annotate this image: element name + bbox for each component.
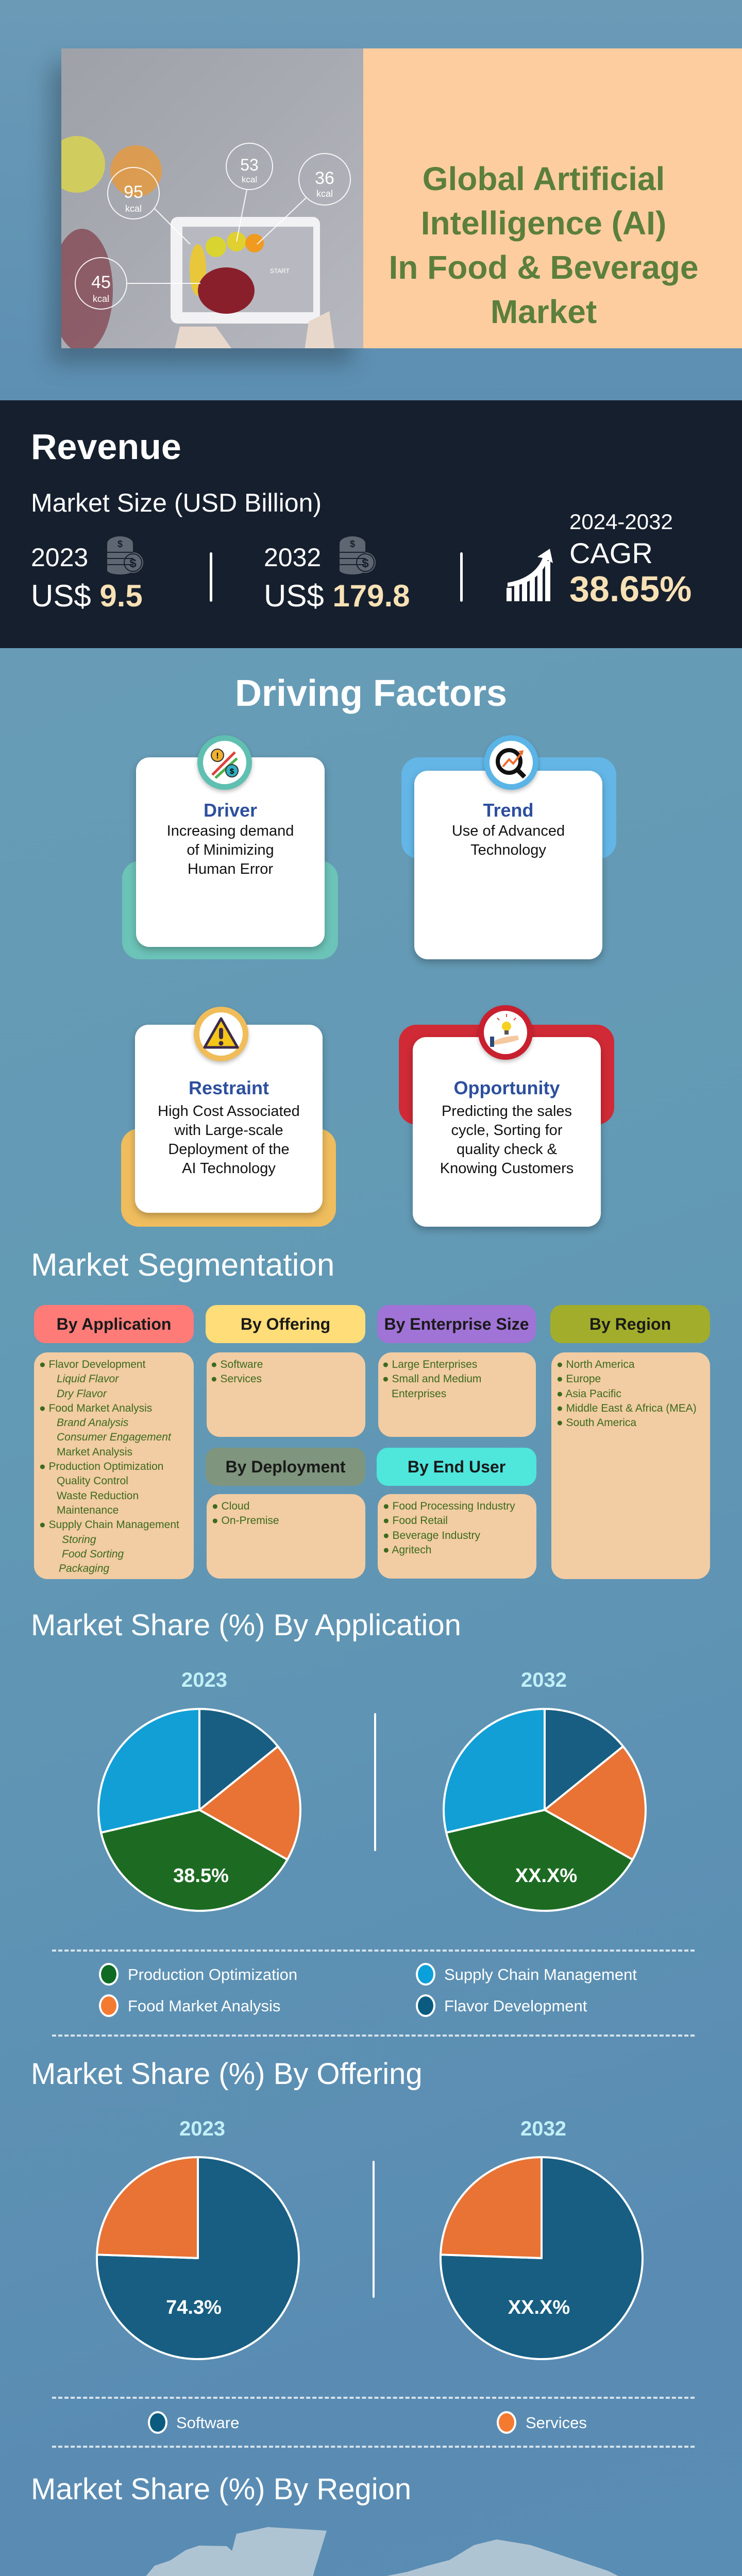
driving factors heading: Driving Factors (235, 673, 507, 714)
heading: market share by application: Market Share (%) By Application (31, 1608, 461, 1642)
panel: trend (401, 735, 616, 965)
icon: trend magnifier (484, 735, 538, 790)
2032 value: US$ 179.8 (264, 579, 410, 613)
panel: driver (122, 735, 338, 959)
segmentation: by application: Maintenance (57, 1504, 119, 1516)
opportunity text: quality check & (457, 1141, 557, 1158)
icon: coins: $ (362, 556, 369, 570)
segmentation: by deployment (206, 1448, 365, 1579)
trend text (452, 823, 565, 858)
restraint text: AI Technology (182, 1160, 276, 1177)
driver text: of Minimizing (187, 842, 274, 858)
segmentation: by application: ● Food Market Analysis (39, 1402, 152, 1414)
divider (373, 2161, 375, 2298)
legend: application: Flavor Development (444, 1997, 587, 2015)
segmentation: by application: Storing (62, 1534, 96, 1546)
segmentation: by application: Consumer Engagement (57, 1431, 171, 1443)
segmentation: by region: ● Europe (556, 1373, 601, 1385)
segmentation: by region: ● Middle East & Africa (MEA) (556, 1402, 697, 1414)
segmentation: by enterprise size: ● Small and Medium (382, 1373, 481, 1385)
opportunity text (440, 1103, 574, 1177)
pie chart: application 2023: 38.5% (173, 1865, 229, 1887)
world map (146, 2527, 618, 2576)
segmentation: by application: ● Flavor Development (39, 1359, 145, 1370)
trend text: Technology (470, 842, 546, 858)
opportunity text: Knowing Customers (440, 1160, 574, 1177)
trend text: Use of Advanced (452, 823, 565, 839)
icon: coins: $ (129, 556, 137, 570)
CAGR: 38.65% (569, 569, 692, 609)
restraint text (158, 1103, 300, 1177)
year label 2032: 2032 (520, 2117, 566, 2140)
legend: offering: Software (176, 2414, 239, 2432)
pie chart: application 2023 (97, 1708, 301, 1912)
icon: driver gears (197, 735, 252, 790)
segmentation: by offering: ● Software (211, 1359, 263, 1370)
segmentation: by end user (377, 1448, 536, 1579)
2023 value (31, 536, 143, 613)
banner image: photo of tablet with calories: kcal (93, 294, 109, 304)
segmentation: by application: ● Production Optimization (39, 1461, 163, 1472)
icon: coins (340, 536, 376, 574)
market size label: Market Size (USD Billion) (31, 488, 322, 517)
driver title: Driver (204, 800, 257, 821)
year label 2032: 2032 (521, 1669, 567, 1691)
panel: opportunity (399, 1005, 614, 1233)
title text (389, 160, 699, 330)
segmentation: by application: Dry Flavor (57, 1388, 107, 1400)
segmentation: by offering: ● Services (211, 1373, 262, 1385)
icon: driver gears: $ (230, 767, 234, 776)
banner image: photo of tablet with calories: 53 (240, 156, 259, 174)
segmentation: by application: Food Sorting (62, 1548, 124, 1560)
legend: offering: Services (526, 2414, 587, 2432)
panel: restraint (121, 1007, 336, 1227)
legend: application: Production Optimization (128, 1965, 297, 1984)
heading: market share by region: Market Share (%) By Region (31, 2472, 411, 2506)
segmentation: by deployment: ● Cloud (212, 1500, 249, 1512)
legend: application: Food Market Analysis (128, 1997, 280, 2015)
restraint text: with Large-scale (174, 1122, 283, 1139)
segmentation: by enterprise size: Enterprises (392, 1388, 446, 1400)
segmentation: by end user: ● Food Processing Industry (383, 1500, 515, 1512)
segmentation: by application (34, 1305, 194, 1579)
banner section background (0, 0, 742, 400)
segmentation: by application: Brand Analysis (57, 1417, 128, 1429)
title text: In Food & Beverage (389, 249, 699, 286)
restraint text: High Cost Associated (158, 1103, 300, 1120)
revenue heading: Revenue (31, 427, 181, 467)
icon: coins: $ (117, 539, 123, 549)
segmentation: by deployment: By Deployment (226, 1458, 345, 1476)
pie chart: application 2032 (443, 1708, 647, 1912)
pie chart: offering 2032 (440, 2156, 644, 2360)
driver text: Human Error (188, 861, 273, 877)
restraint text: Deployment of the (168, 1141, 290, 1158)
driver text (167, 823, 294, 877)
banner image: photo of tablet with calories: START (270, 267, 290, 275)
segmentation: by region: ● South America (556, 1417, 636, 1429)
icon: driver gears: ! (216, 752, 219, 760)
2032 value: 2032 (264, 543, 321, 572)
title text: Market (491, 293, 597, 330)
divider (460, 552, 463, 602)
segmentation: by offering: By Offering (241, 1315, 330, 1333)
legend: offering (148, 2411, 587, 2434)
divider (210, 552, 212, 602)
2032 value (264, 536, 410, 613)
legend: application (99, 1963, 637, 2017)
year label 2023: 2023 (181, 1669, 227, 1691)
segmentation: by end user: ● Beverage Industry (383, 1530, 480, 1541)
segmentation: by enterprise size (377, 1305, 536, 1437)
title text: Global Artificial (423, 160, 665, 197)
opportunity text: cycle, Sorting for (451, 1122, 562, 1139)
segmentation: by deployment: ● On-Premise (212, 1515, 279, 1527)
pie chart: offering 2032: XX.X% (508, 2297, 570, 2318)
segmentation: by application: ● Supply Chain Management (39, 1519, 179, 1531)
divider (374, 1713, 376, 1851)
heading: market share by offering: Market Share (%) By Offering (31, 2057, 423, 2091)
icon: coins (107, 536, 143, 574)
segmentation: by region (550, 1305, 710, 1579)
2023 value: 2023 (31, 543, 88, 572)
revenue band (0, 400, 742, 648)
banner image: photo of tablet with calories: kcal (242, 175, 257, 184)
segmentation: by application: Liquid Flavor (57, 1373, 119, 1385)
trend title: Trend (483, 800, 534, 821)
segmentation: by application: Packaging (59, 1563, 109, 1574)
banner image: photo of tablet with calories (61, 48, 363, 348)
icon: idea hand (478, 1005, 533, 1060)
segmentation: by offering (206, 1305, 365, 1437)
heading: market segmentation: Market Segmentation (31, 1247, 334, 1283)
segmentation: by region: ● Asia Pacific (556, 1388, 621, 1400)
segmentation: by end user: By End User (408, 1458, 505, 1476)
icon: growth chart (507, 549, 553, 601)
opportunity title: Opportunity (454, 1077, 560, 1098)
banner image: photo of tablet with calories: kcal (316, 189, 333, 199)
icon: warning (194, 1007, 248, 1061)
2023 value: US$ 9.5 (31, 579, 143, 613)
restraint title: Restraint (189, 1077, 269, 1098)
CAGR (569, 510, 692, 609)
segmentation: by application: Quality Control (57, 1475, 128, 1487)
CAGR: 2024-2032 (569, 510, 673, 534)
segmentation: by end user: ● Food Retail (383, 1515, 448, 1527)
legend: application: Supply Chain Management (444, 1965, 637, 1984)
segmentation: by application: Market Analysis (57, 1446, 132, 1458)
CAGR: CAGR (569, 537, 653, 569)
pie chart: offering 2023 (96, 2156, 300, 2360)
driver text: Increasing demand (167, 823, 294, 839)
banner image: photo of tablet with calories: 95 (124, 182, 143, 202)
segmentation: by region: By Region (589, 1315, 671, 1333)
segmentation: by application: Waste Reduction (57, 1490, 139, 1502)
segmentation: by region: ● North America (556, 1359, 635, 1370)
banner image: photo of tablet with calories: 45 (91, 273, 111, 292)
banner image: photo of tablet with calories: 36 (315, 168, 334, 188)
segmentation: by application: By Application (57, 1315, 171, 1333)
opportunity text: Predicting the sales (442, 1103, 572, 1120)
segmentation: by enterprise size: ● Large Enterprises (382, 1359, 477, 1370)
pie chart: offering 2023: 74.3% (166, 2297, 222, 2318)
segmentation: by end user: ● Agritech (383, 1544, 431, 1556)
year label 2023: 2023 (179, 2117, 225, 2140)
banner image: photo of tablet with calories: kcal (125, 204, 142, 214)
icon: coins: $ (350, 539, 355, 549)
title panel (363, 48, 742, 348)
segmentation: by enterprise size: By Enterprise Size (384, 1315, 529, 1333)
pie chart: application 2032: XX.X% (515, 1865, 577, 1887)
title text: Intelligence (AI) (421, 205, 666, 242)
